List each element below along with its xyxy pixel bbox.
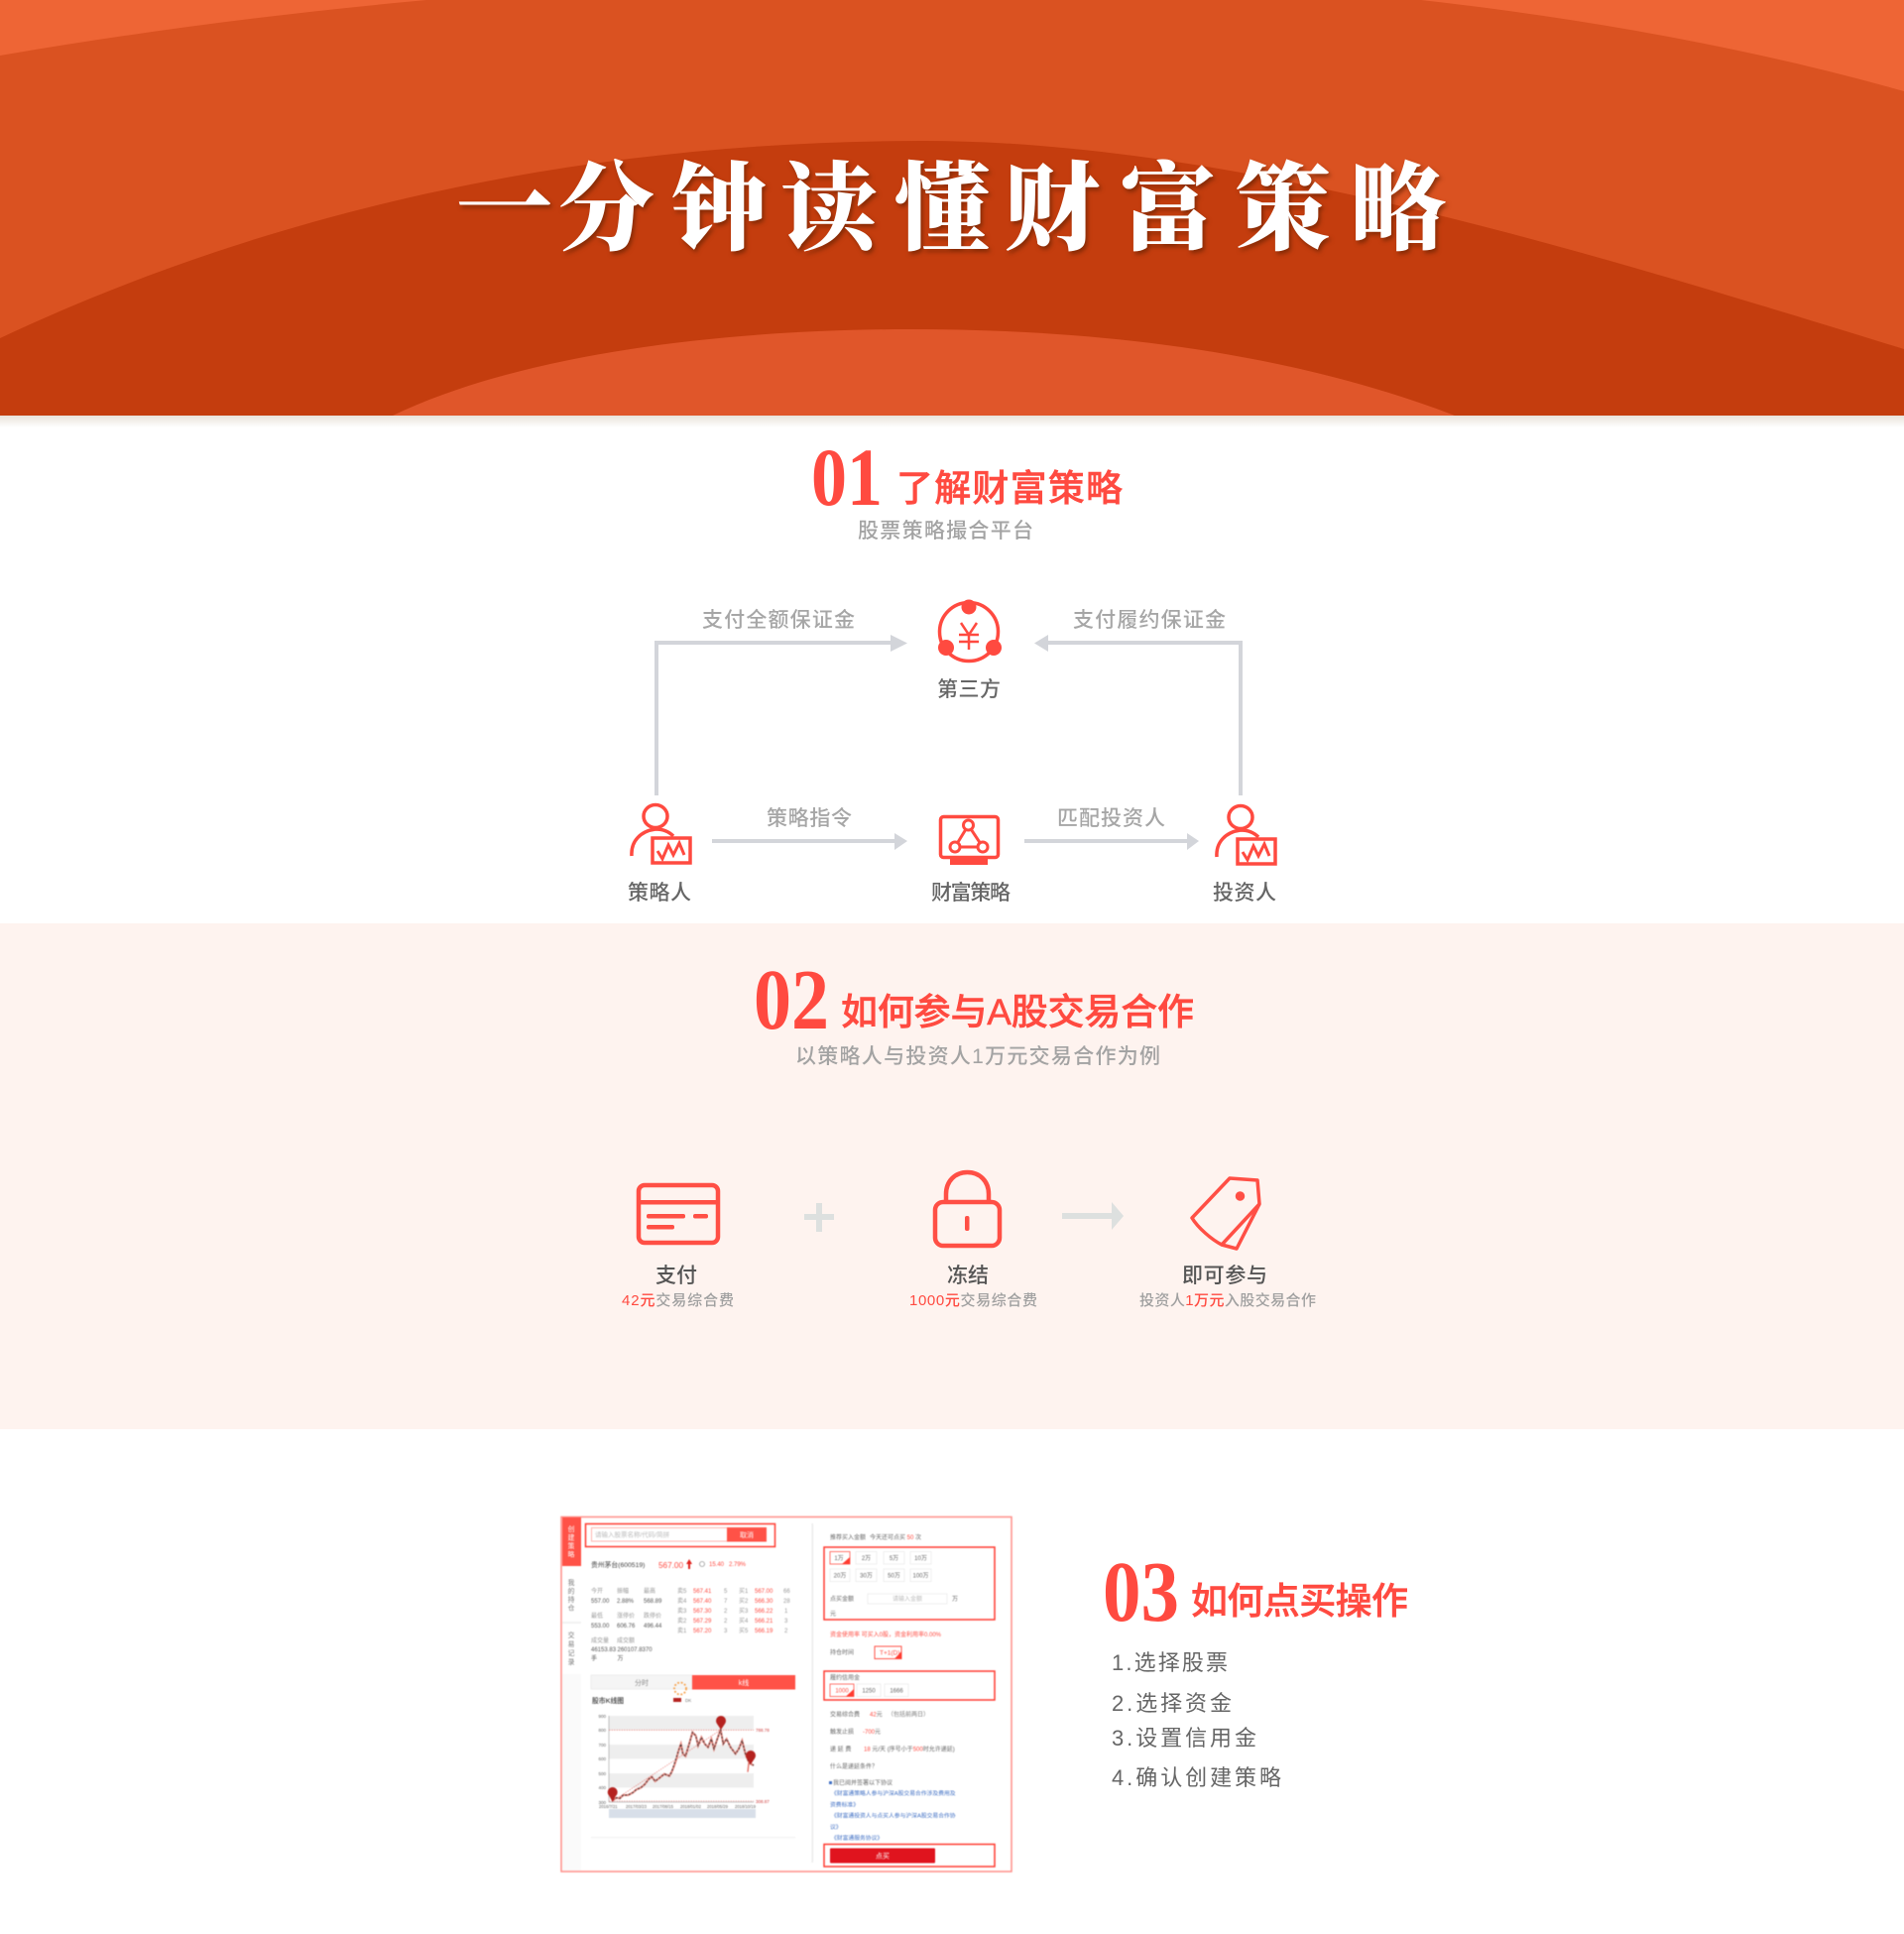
order book: 2 [724, 1609, 728, 1615]
title: 一分钟读懂财富策略 [456, 131, 1446, 270]
order book: 567.29 [693, 1619, 712, 1625]
search box [585, 1523, 775, 1547]
buy button box [824, 1845, 995, 1867]
label: third party: 第三方 [937, 678, 1001, 701]
panel: trading screenshot [561, 1517, 1012, 1872]
icon: arrow [1062, 1202, 1124, 1230]
quote table: 振幅 [617, 1587, 629, 1595]
purchase form: 今天还可点买 50 次 [870, 1533, 921, 1541]
purchase form: （包括前两日） [888, 1710, 929, 1718]
quote table: 万 [617, 1655, 624, 1662]
arrow: strategist to strategy [712, 833, 907, 850]
steps list: 3.设置信用金 [1112, 1726, 1256, 1751]
section 01 heading: 了解财富策略 [896, 468, 1123, 509]
stock quote row: 2.79% [729, 1562, 747, 1568]
order book: 3 [724, 1629, 728, 1634]
quote table: 手 [591, 1654, 597, 1662]
sidebar: 创 [568, 1524, 575, 1533]
purchase form: 《财富通投资人与点买人参与沪深A股交易合作协 [831, 1811, 956, 1819]
participation steps [622, 1172, 1316, 1309]
sidebar: 持 [568, 1595, 575, 1604]
amount selection box: 1万 [834, 1555, 844, 1562]
panel: section 02 background [0, 923, 1904, 1429]
quote table [591, 1587, 662, 1662]
arrow: strategist to third party [654, 635, 907, 795]
amount selection box: 100万 [912, 1573, 929, 1579]
order book: 5 [724, 1589, 728, 1595]
chart tabs [591, 1675, 795, 1694]
candlestick chart: 800 [598, 1728, 606, 1733]
quote table: 606.76 [617, 1624, 636, 1630]
section 03 heading [1103, 1543, 1408, 1639]
chart tabs: 分时 [635, 1678, 649, 1687]
candlestick chart: DK [685, 1698, 691, 1703]
order book: 566.19 [755, 1629, 774, 1634]
order book: 567.20 [693, 1629, 712, 1634]
section 03 heading: 如何点买操作 [1191, 1581, 1408, 1622]
section 01 heading [811, 431, 1123, 543]
buy button box: 点买 [876, 1853, 890, 1861]
stock quote row [591, 1559, 747, 1570]
quote table: 260107.8370 [617, 1647, 653, 1653]
amount selection box: 请输入金额 [892, 1595, 922, 1603]
order book: 566.21 [755, 1619, 774, 1625]
credit selection box [824, 1671, 995, 1700]
amount selection box [824, 1547, 995, 1620]
step: join [1139, 1265, 1316, 1309]
amount selection box: 10万 [914, 1555, 927, 1562]
quote table: 涨停价 [617, 1612, 635, 1620]
purchase form: 《财富通策略人参与沪深A股交易合作涉及费用及 [831, 1789, 956, 1797]
chart tabs: k线 [739, 1678, 749, 1687]
sidebar: 录 [568, 1658, 575, 1666]
quote table: 496.44 [644, 1624, 662, 1630]
order book: 566.30 [755, 1599, 774, 1605]
step: pay: 支付 [655, 1265, 697, 1287]
sidebar: 记 [568, 1649, 575, 1657]
step: join: 即可参与 [1182, 1265, 1267, 1287]
order book: 567.41 [693, 1589, 712, 1595]
order book: 66 [783, 1589, 790, 1595]
quote table: 46153.83 [591, 1647, 617, 1653]
order book: 卖3 [677, 1608, 687, 1615]
order book: 买1 [739, 1587, 749, 1595]
sidebar: 仓 [568, 1603, 575, 1613]
section 01 heading: 股票策略撮合平台 [858, 520, 1033, 543]
candlestick chart: 308.87 [756, 1799, 770, 1804]
label: pay full margin: 支付全额保证金 [702, 609, 855, 632]
order book: 买5 [739, 1627, 749, 1634]
quote table: 最低 [591, 1612, 603, 1620]
order book: 566.22 [755, 1609, 774, 1615]
label: strategy instruction: 策略指令 [767, 807, 852, 830]
order book: 567.00 [755, 1589, 774, 1595]
search box: 取消 [740, 1530, 754, 1539]
candlestick chart: 600 [598, 1756, 606, 1761]
order book: 卖5 [677, 1588, 687, 1595]
quote table: 553.00 [591, 1624, 610, 1630]
section 02 heading [754, 951, 1194, 1068]
candlestick chart: 2017/03/23 [626, 1804, 648, 1809]
credit selection box: 1666 [890, 1688, 903, 1694]
order book: 2 [724, 1619, 728, 1625]
label: match investors: 匹配投资人 [1057, 807, 1165, 830]
purchase form: 交易综合费 [830, 1710, 860, 1718]
icon: wealth strategy monitor [940, 817, 998, 865]
label: investor: 投资人 [1213, 882, 1276, 905]
icon: strategist [632, 805, 690, 863]
order book: 买2 [739, 1597, 749, 1605]
amount selection box: 20万 [834, 1573, 846, 1579]
icon: price tag [1192, 1178, 1259, 1249]
order book: 1 [784, 1609, 788, 1615]
candlestick chart: 2018/05/29 [707, 1804, 729, 1809]
candlestick chart: 400 [598, 1785, 606, 1790]
amount selection box: 2万 [862, 1555, 871, 1562]
sidebar: 略 [568, 1549, 575, 1559]
flow diagram [628, 599, 1276, 905]
stock quote row: 15.40 [709, 1562, 725, 1568]
sidebar: 策 [568, 1541, 575, 1550]
purchase form: 议》 [830, 1823, 842, 1831]
sidebar: 建 [568, 1533, 575, 1541]
header banner [0, 0, 1904, 427]
order book: 567.40 [693, 1599, 712, 1605]
section 02 heading: 02 [754, 951, 829, 1047]
candlestick chart: 788.78 [756, 1728, 770, 1733]
purchase form: 持仓时间 [830, 1648, 854, 1656]
candlestick chart: 2016/7/21 [599, 1804, 618, 1809]
quote table: 568.89 [644, 1599, 662, 1605]
quote table: 跌停价 [644, 1612, 661, 1620]
section 02 heading: 以策略人与投资人1万元交易合作为例 [795, 1045, 1160, 1068]
purchase form: 触发止损 [830, 1728, 854, 1736]
amount selection box: 点买金额 [830, 1595, 854, 1603]
order book: 买4 [739, 1617, 749, 1625]
candlestick chart: 300 [598, 1800, 606, 1805]
order book: 卖1 [677, 1628, 687, 1634]
step: freeze: 冻结 [947, 1265, 989, 1287]
section 01 heading: 01 [811, 431, 883, 523]
steps list: 1.选择股票 [1112, 1650, 1228, 1675]
stock quote row: 贵州茅台(600519) [591, 1560, 645, 1569]
order book: 7 [724, 1599, 728, 1605]
arrow: strategy to investor [1024, 833, 1199, 850]
icon: investor [1217, 805, 1275, 864]
quote table: 今开 [591, 1587, 603, 1595]
credit selection box: 履约信用金 [830, 1674, 860, 1682]
sidebar [562, 1517, 581, 1871]
purchase form: 递 延 费 [830, 1746, 851, 1753]
purchase form: 推荐买入金额 [830, 1533, 866, 1541]
steps list [1112, 1650, 1281, 1790]
step: pay: 42元交易综合费 [622, 1291, 734, 1309]
quote table: 成交量 [591, 1636, 609, 1644]
purchase form: 18 元/天 (序号小于500时允许递延) [864, 1746, 955, 1753]
order book: 卖2 [677, 1618, 687, 1625]
label: pay performance margin: 支付履约保证金 [1073, 609, 1226, 632]
stock quote row: 567.00 [658, 1561, 683, 1570]
quote table: 最高 [644, 1587, 655, 1595]
quote table: 2.88% [617, 1599, 635, 1605]
label: strategist: 策略人 [628, 882, 691, 905]
order book: 28 [783, 1599, 790, 1605]
purchase form: 资费标准》 [830, 1801, 859, 1809]
credit selection box: 1000 [835, 1688, 849, 1694]
credit selection box: 1250 [862, 1688, 876, 1694]
label: wealth strategy: 财富策略 [931, 882, 1011, 905]
purchase form: 什么是递延条件？ [830, 1762, 878, 1770]
icon: third party [938, 599, 1002, 661]
purchase form: 42元 [870, 1712, 883, 1718]
arrow: investor to third party [1034, 635, 1243, 795]
sidebar: 易 [568, 1640, 575, 1648]
sidebar: 交 [568, 1631, 575, 1639]
quote table: 成交额 [617, 1636, 635, 1644]
quote table: 557.00 [591, 1599, 610, 1605]
order book: 卖4 [677, 1598, 687, 1605]
steps list: 2.选择资金 [1112, 1691, 1232, 1716]
purchase form [824, 1533, 995, 1867]
order book: 买3 [739, 1607, 749, 1615]
amount selection box: 元 [830, 1611, 836, 1618]
candlestick chart: 700 [598, 1743, 606, 1748]
step: join: 投资人1万元入股交易合作 [1139, 1291, 1316, 1309]
step: freeze [909, 1265, 1037, 1309]
purchase form: -700元 [863, 1729, 881, 1736]
steps list: 4.确认创建策略 [1112, 1765, 1281, 1790]
search box: 请输入股票名称/代码/简拼 [595, 1529, 670, 1539]
amount selection box: 50万 [888, 1573, 900, 1579]
candlestick chart: 2017/08/15 [653, 1804, 674, 1809]
candlestick chart: 2018/01/02 [680, 1804, 702, 1809]
section 02 heading: 如何参与A股交易合作 [841, 992, 1194, 1032]
order book: 3 [784, 1619, 788, 1625]
amount selection box: 5万 [890, 1555, 898, 1562]
sidebar: 我 [568, 1578, 575, 1587]
candlestick chart: 股市K线图 [592, 1696, 624, 1705]
candlestick chart: 2018/10/19 [735, 1804, 757, 1809]
candlestick chart: 900 [598, 1714, 606, 1719]
step: pay [622, 1265, 734, 1309]
amount selection box: 30万 [860, 1573, 873, 1579]
icon: bank card [639, 1185, 718, 1243]
candlestick chart [592, 1696, 770, 1818]
amount selection box: 万 [952, 1596, 958, 1603]
order book: 567.30 [693, 1609, 712, 1615]
icon: plus [804, 1203, 834, 1232]
step: freeze: 1000元交易综合费 [909, 1291, 1037, 1309]
icon: lock [935, 1172, 1000, 1246]
purchase form: 资金使用率 可买入0股，资金利用率0.00% [830, 1631, 942, 1638]
purchase form: 我已阅并签署以下协议 [833, 1779, 892, 1787]
purchase form: 《财富通服务协议》 [831, 1834, 883, 1842]
sidebar: 的 [568, 1587, 575, 1595]
purchase form: T+1(D) [880, 1650, 899, 1656]
candlestick chart: 500 [598, 1771, 606, 1776]
section 03 heading: 03 [1103, 1543, 1179, 1639]
order book: 2 [784, 1629, 788, 1634]
order book [677, 1587, 790, 1634]
